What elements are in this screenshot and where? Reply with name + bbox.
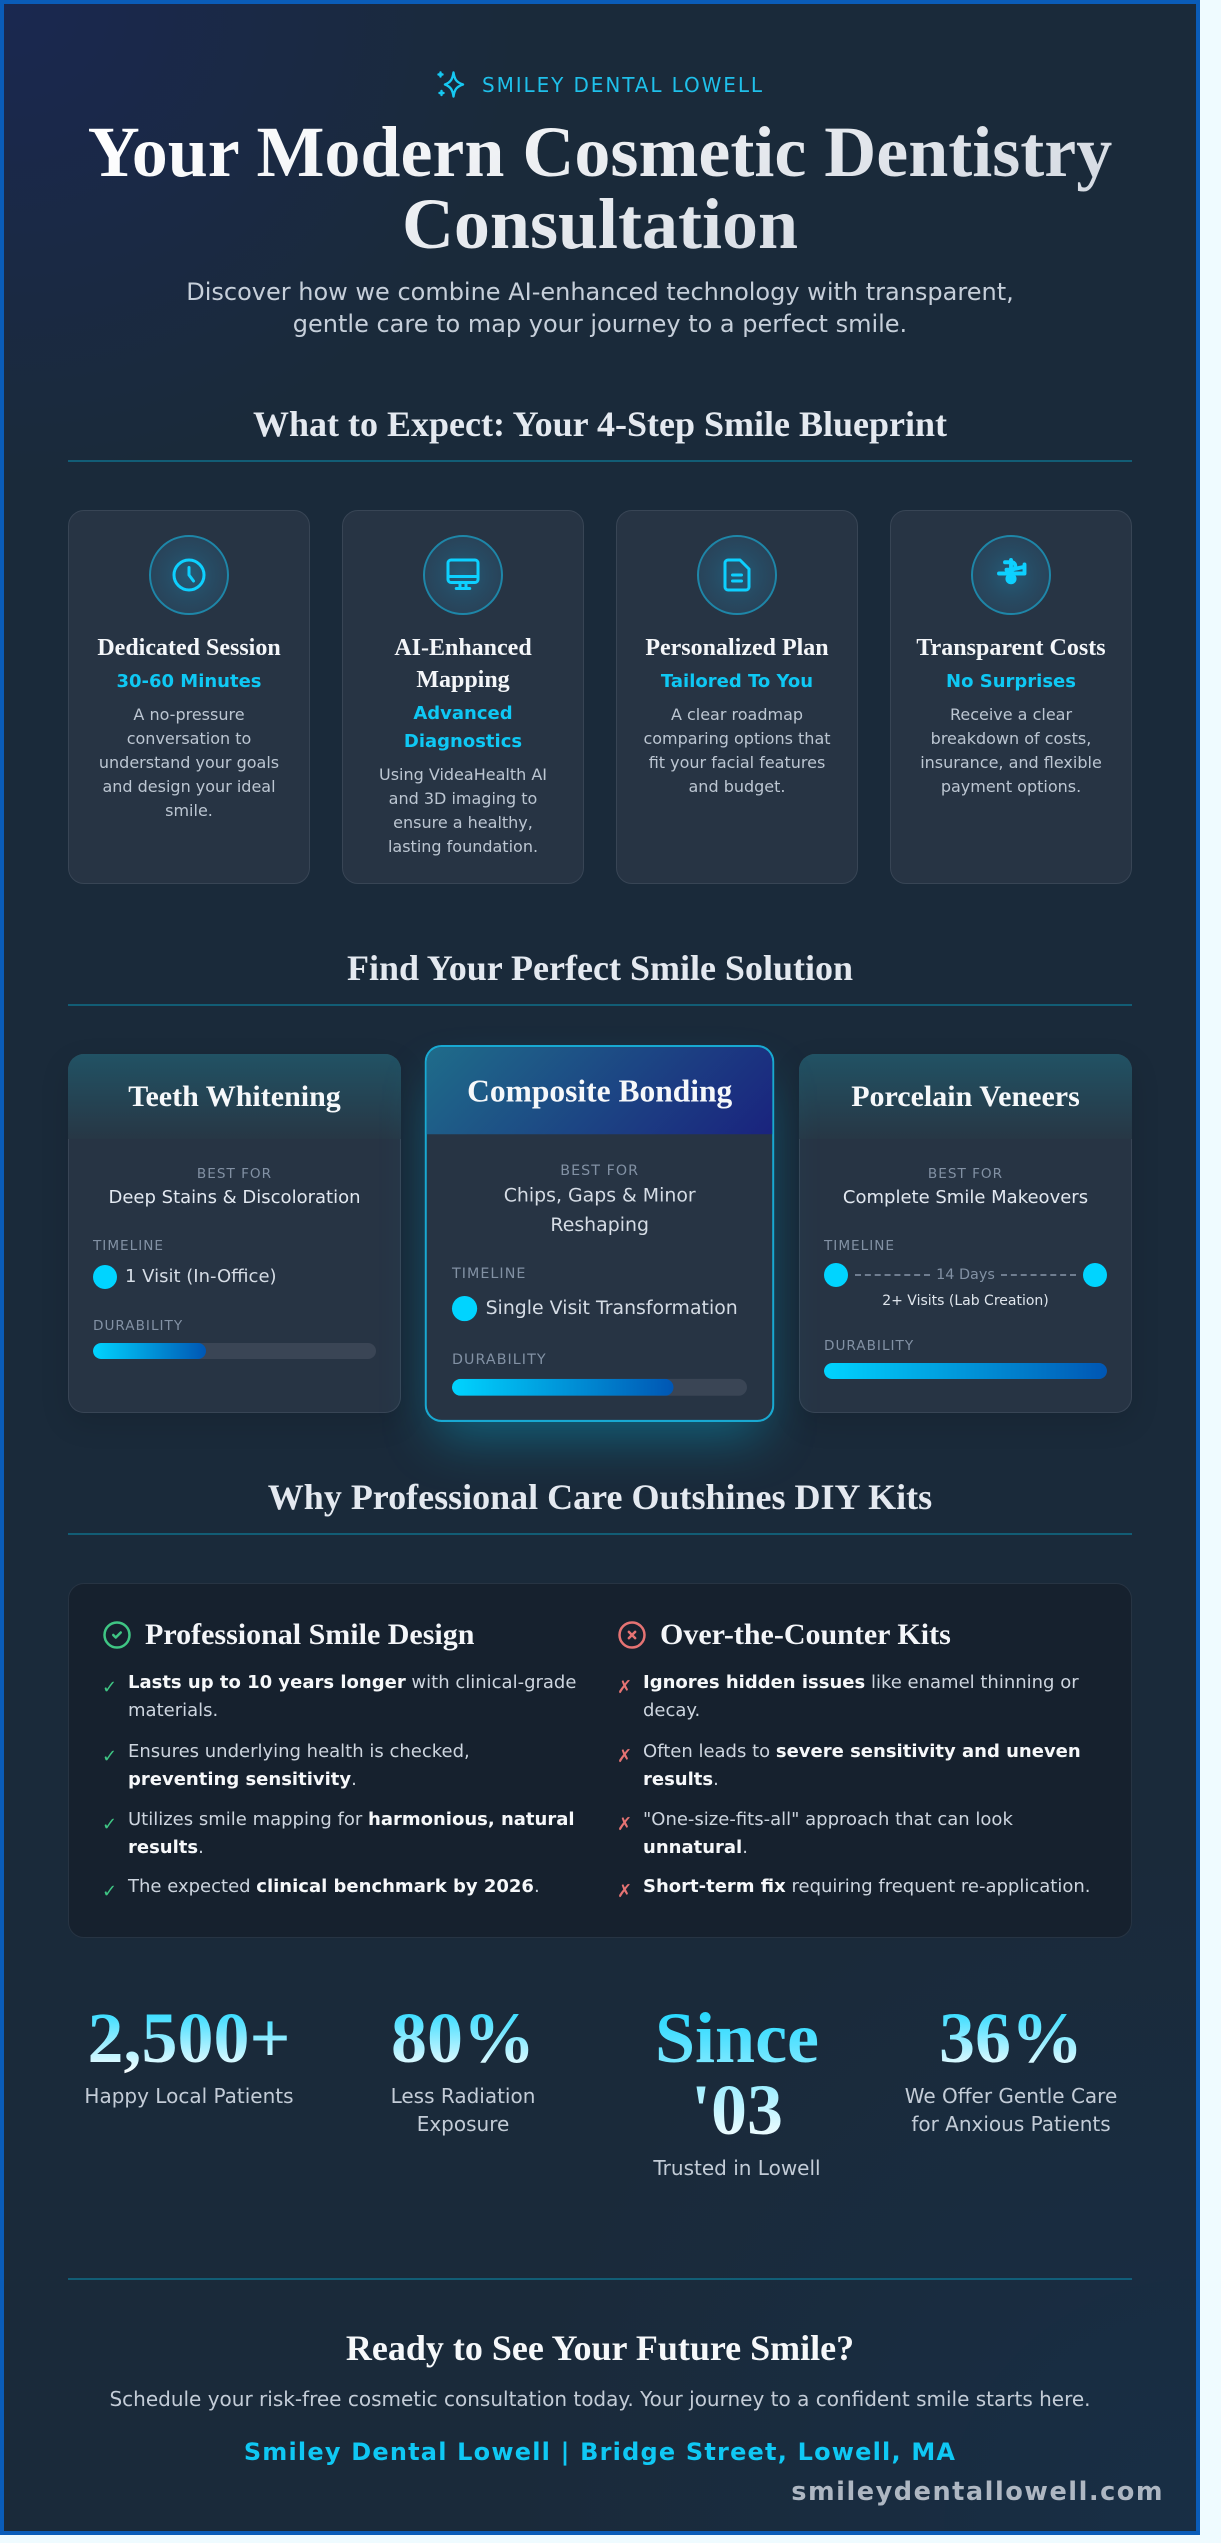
timeline label: TIMELINE: [824, 1238, 895, 1254]
best for value: Deep Stains & Discoloration: [108, 1187, 360, 1208]
stat label: Trusted in Lowell: [653, 2156, 821, 2180]
list item: [643, 1672, 1079, 1721]
list marker: ✓: [102, 1814, 117, 1835]
stat number: 80%: [391, 1998, 535, 2078]
step description: payment options.: [941, 777, 1081, 796]
stat label: Less Radiation: [391, 2084, 535, 2108]
list marker: ✗: [617, 1677, 632, 1698]
title: Consultation: [402, 184, 798, 264]
step description: insurance, and flexible: [920, 753, 1102, 772]
icon: green check circle: [103, 1621, 131, 1649]
list item: unnatural.: [643, 1837, 748, 1858]
step title: AI-Enhanced: [394, 635, 532, 661]
timeline label: TIMELINE: [93, 1238, 164, 1254]
step description: Receive a clear: [950, 705, 1072, 724]
stat number: [890, 2002, 1132, 2074]
step description: understand your goals: [99, 753, 279, 772]
header brand: [437, 71, 764, 98]
icon: monitor: [423, 535, 503, 615]
timeline track: 14 Days: [936, 1267, 995, 1283]
durability label: DURABILITY: [452, 1352, 547, 1368]
stat label: Happy Local Patients: [84, 2084, 294, 2108]
step description: conversation to: [127, 729, 251, 748]
step description: [379, 765, 547, 856]
durability label: DURABILITY: [93, 1318, 183, 1334]
stat number: [342, 2002, 584, 2074]
best for label: BEST FOR: [197, 1166, 272, 1182]
list item: The expected clinical benchmark by 2026.: [128, 1876, 540, 1897]
step title: Transparent Costs: [916, 635, 1106, 661]
stat number: 36%: [939, 1998, 1083, 2078]
list item: materials.: [128, 1700, 218, 1721]
list item: results.: [128, 1837, 204, 1858]
card title: Teeth Whitening: [128, 1080, 341, 1113]
stat number: [616, 2002, 858, 2146]
contact line: Smiley Dental Lowell | Bridge Street, Lowell, MA: [244, 2438, 956, 2466]
stat label: We Offer Gentle Care: [905, 2084, 1117, 2108]
stat number: 2,500+: [87, 1998, 291, 2078]
list marker: ✗: [617, 1814, 632, 1835]
stat: anxious patients: [905, 1998, 1117, 2136]
best for label: BEST FOR: [561, 1163, 639, 1179]
solution card: composite bonding: [425, 1045, 775, 1422]
timeline track: [824, 1263, 1107, 1287]
brand name: SMILEY DENTAL LOWELL: [482, 73, 764, 97]
subtitle: Discover how we combine AI-enhanced technology with transparent,: [186, 278, 1014, 306]
solution card: teeth whitening: [68, 1054, 401, 1413]
best for value: Reshaping: [551, 1214, 649, 1236]
card header: [799, 1054, 1132, 1139]
stat label: [905, 2084, 1117, 2136]
durability bar: [93, 1343, 376, 1359]
website: smileydentallowell.com: [791, 2477, 1164, 2507]
durability bar: [452, 1379, 747, 1396]
comparison panel: [68, 1583, 1132, 1938]
card title: Porcelain Veneers: [851, 1080, 1080, 1113]
card title: Composite Bonding: [467, 1074, 733, 1109]
list item: Ensures underlying health is checked,: [128, 1741, 470, 1762]
step description: Using VideaHealth AI: [379, 765, 547, 784]
list marker: ✗: [617, 1746, 632, 1767]
step subtitle: Diagnostics: [404, 731, 522, 752]
footer text: Schedule your risk-free cosmetic consultation today. Your journey to a confident smile starts here.: [109, 2387, 1091, 2411]
list item: results.: [643, 1769, 719, 1790]
list marker: ✓: [102, 1881, 117, 1902]
timeline value: 1 Visit (In-Office): [125, 1266, 277, 1287]
best for value: Complete Smile Makeovers: [843, 1187, 1088, 1208]
timeline value: Single Visit Transformation: [486, 1297, 738, 1319]
step title: Mapping: [416, 667, 510, 693]
step description: smile.: [165, 801, 213, 820]
step description: [643, 705, 831, 796]
step subtitle: [404, 703, 522, 752]
icon: costs: [971, 535, 1051, 615]
list item: [643, 1741, 1081, 1790]
icon: clock: [149, 535, 229, 615]
step title: [394, 635, 532, 693]
timeline dot: [93, 1265, 117, 1289]
stat: since 2003: [653, 1998, 821, 2180]
icon: red x circle: [618, 1621, 646, 1649]
heading: smile solution: Find Your Perfect Smile Solution: [347, 948, 853, 988]
heading: 4-step blueprint: What to Expect: Your 4-Step Smile Blueprint: [253, 404, 947, 444]
step description: lasting foundation.: [388, 837, 538, 856]
subtitle: [186, 278, 1014, 338]
timeline label: TIMELINE: [452, 1266, 527, 1282]
heading: professional care: Why Professional Care Outshines DIY Kits: [268, 1477, 932, 1517]
step title: Personalized Plan: [645, 635, 829, 661]
step description: fit your facial features: [649, 753, 825, 772]
stat number: Since: [655, 1998, 819, 2078]
step title: Dedicated Session: [97, 635, 281, 661]
step description: ensure a healthy,: [393, 813, 533, 832]
list marker: ✗: [617, 1881, 632, 1902]
stat: radiation: [391, 1998, 535, 2136]
step description: [920, 705, 1102, 796]
list item: decay.: [643, 1700, 700, 1721]
subtitle: gentle care to map your journey to a perfect smile.: [293, 310, 907, 338]
durability bar: [824, 1363, 1107, 1379]
step card: dedicated session: [68, 510, 310, 884]
list item: Lasts up to 10 years longer with clinical-grade: [128, 1672, 576, 1693]
step description: breakdown of costs,: [931, 729, 1091, 748]
best for label: BEST FOR: [928, 1166, 1003, 1182]
list item: [128, 1672, 576, 1721]
step card: AI-enhanced mapping: [342, 510, 584, 884]
stat label: Exposure: [417, 2112, 509, 2136]
step description: [99, 705, 279, 820]
stat: patients: [84, 1998, 294, 2108]
list marker: ✓: [102, 1746, 117, 1767]
step card: personalized plan: [616, 510, 858, 884]
stat label: for Anxious Patients: [911, 2112, 1111, 2136]
timeline value: 2+ Visits (Lab Creation): [882, 1293, 1049, 1309]
title: Your Modern Cosmetic Dentistry: [88, 112, 1112, 192]
list item: [643, 1809, 1013, 1858]
list item: "One-size-fits-all" approach that can look: [643, 1809, 1013, 1830]
list item: [128, 1809, 575, 1858]
list item: Often leads to severe sensitivity and uneven: [643, 1741, 1081, 1762]
step description: A no-pressure: [133, 705, 245, 724]
footer call to action: Ready to See Your Future Smile?: [346, 2328, 854, 2368]
step card: transparent costs: [890, 510, 1132, 884]
title: [0, 116, 1200, 260]
step subtitle: Tailored To You: [661, 671, 813, 692]
step description: and budget.: [688, 777, 786, 796]
durability label: DURABILITY: [824, 1338, 914, 1354]
icon: document: [697, 535, 777, 615]
card header: [427, 1047, 773, 1134]
step description: and 3D imaging to: [389, 789, 537, 808]
list item: [128, 1741, 470, 1790]
timeline dot: [452, 1296, 477, 1321]
list item: preventing sensitivity.: [128, 1769, 357, 1790]
step description: and design your ideal: [102, 777, 276, 796]
step description: comparing options that: [643, 729, 831, 748]
column heading: professional: Professional Smile Design: [145, 1618, 474, 1651]
solution card: porcelain veneers: [799, 1054, 1132, 1413]
card header: [68, 1054, 401, 1139]
column heading: over the counter: Over-the-Counter Kits: [660, 1618, 951, 1651]
list marker: ✓: [102, 1677, 117, 1698]
step subtitle: Advanced: [413, 703, 513, 724]
step subtitle: No Surprises: [946, 671, 1076, 692]
best for value: Chips, Gaps & Minor: [504, 1185, 696, 1207]
stat number: '03: [691, 2070, 783, 2150]
list item: Utilizes smile mapping for harmonious, natural: [128, 1809, 575, 1830]
list item: Ignores hidden issues like enamel thinning or: [643, 1672, 1079, 1693]
icon: sparkles: [437, 71, 464, 98]
step subtitle: 30-60 Minutes: [116, 671, 262, 692]
stat label: [391, 2084, 535, 2136]
best for value: [504, 1185, 696, 1236]
list item: Short-term fix requiring frequent re-application.: [643, 1876, 1090, 1897]
step description: A clear roadmap: [671, 705, 803, 724]
